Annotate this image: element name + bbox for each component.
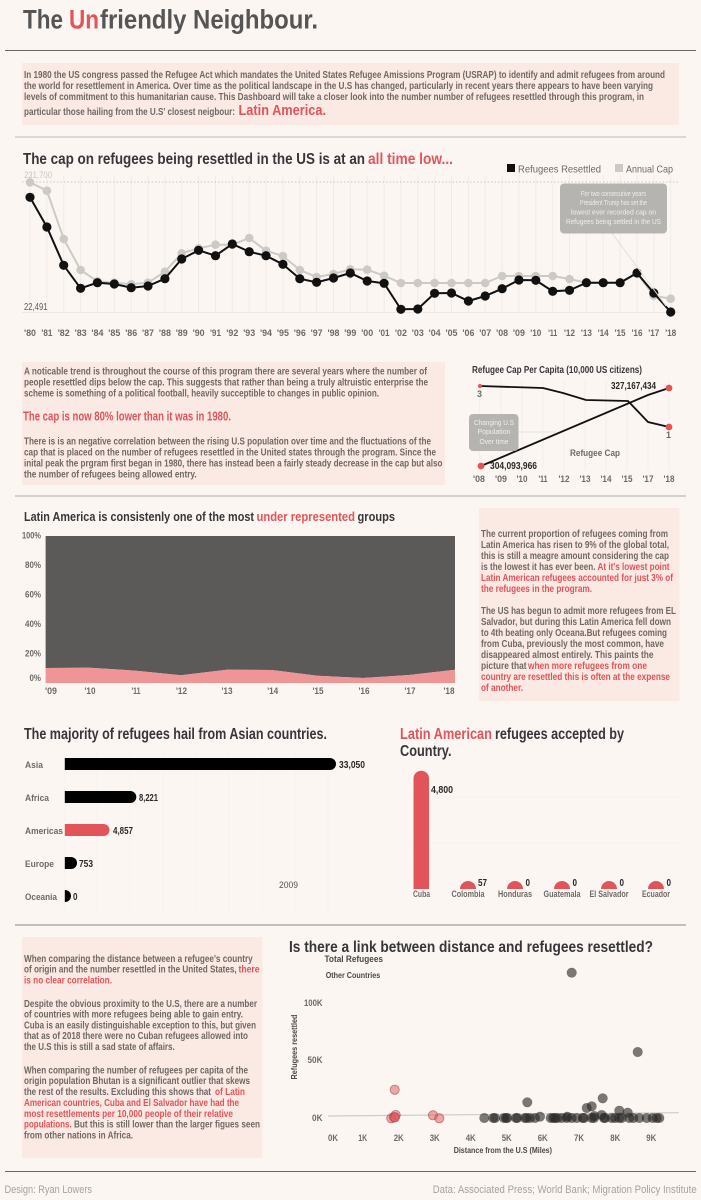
panel: distance text: Despite the obvious proximity to the U.S, there are a number: [24, 999, 257, 1010]
x axis: 1K: [358, 1133, 367, 1144]
bar: Cuba: [413, 771, 453, 900]
title: The: [23, 4, 63, 34]
heading: all time low: The cap on refugees being resettled in the US is at an: [23, 151, 365, 168]
bar: Oceania: [25, 890, 78, 903]
year axis: '17: [642, 474, 654, 485]
legend: Annual Cap: [626, 164, 673, 176]
year axis: '08: [473, 474, 485, 485]
points: Latin America: [387, 1085, 444, 1123]
year axis: '10: [84, 686, 96, 697]
year axis: [45, 686, 454, 697]
percent axis: 100%: [22, 530, 41, 542]
heading: all time low: all time low...: [368, 151, 453, 168]
callout: Trump cap: lowest ever recorded cap on: [571, 208, 656, 216]
bar: Europe: [25, 857, 93, 870]
chart heading: Country.: [400, 743, 452, 760]
panel: distance text: When comparing the distance between a refugee's country: [24, 954, 253, 965]
panel: latin america proportion text: [479, 508, 680, 701]
year axis: '92: [226, 328, 238, 339]
value labels: 327,167,434: [611, 381, 656, 392]
year axis: '99: [344, 328, 356, 339]
year axis: '88: [159, 328, 171, 339]
line: refugee cap: [480, 386, 669, 427]
year axis: '18: [665, 328, 676, 339]
panel: refugees by region bar chart: [24, 726, 365, 912]
panel: distance text: there: [238, 964, 260, 976]
value labels: [477, 381, 672, 472]
year axis: '03: [412, 328, 424, 339]
year axis: '11: [548, 328, 558, 339]
callout: Trump cap: Refugees being settled in the US: [566, 217, 661, 226]
area: Latin America: [46, 668, 455, 683]
x axis: 4K: [466, 1133, 476, 1144]
year axis: '12: [558, 474, 570, 485]
footer: design credit: Design: Ryan Lowers: [4, 1184, 92, 1196]
chart heading: refugees accepted by: [495, 726, 624, 743]
year axis: '97: [311, 328, 323, 339]
panel: distance text: But this is still lower than the larger figues seen: [74, 1120, 260, 1130]
value label: peak: 231,700: [24, 170, 52, 181]
x axis: 2K: [394, 1133, 404, 1144]
value labels: 1: [666, 430, 672, 441]
bar: Colombia: 57: [478, 878, 487, 889]
percent axis: 0%: [30, 673, 41, 684]
panel: latin america proportion text: the refugees in the program.: [481, 584, 592, 595]
bar: Africa: [25, 791, 158, 804]
panel: latin america proportion text: is the lowest it has ever been.: [481, 562, 596, 573]
callout: Trump cap: For two consecutive years: [581, 189, 646, 198]
points: other countries: [480, 968, 664, 1123]
year axis: '09: [513, 328, 525, 339]
bar: Colombia: [452, 878, 487, 900]
year axis: '09: [495, 474, 507, 485]
year axis: '15: [622, 474, 633, 485]
year axis: '18: [444, 686, 454, 697]
annual cap series: [30, 182, 671, 299]
bar: Cuba: 4,800: [431, 785, 453, 796]
year axis: '10: [516, 474, 528, 485]
panel: latin america proportion text: picture that: [481, 661, 527, 672]
y axis: 0K: [312, 1113, 323, 1124]
year axis: '96: [294, 328, 306, 339]
year axis: '15: [615, 328, 626, 339]
callout: changing population: Changing U.S: [474, 418, 514, 427]
panel: distance text: most resettlements per 10,000 people of their relative: [24, 1109, 233, 1120]
chart heading: Latin American: [400, 726, 492, 743]
panel: distance scatter plot: [289, 939, 679, 1155]
x axis: 8K: [610, 1133, 620, 1144]
panel: noticable trend text: scheme is something of a political football, heavily succeptible to changes in public opinion.: [24, 388, 379, 400]
panel: noticable trend text: There is is an negative correlation between the rising U.S population over time and the fluctuations of the: [24, 436, 431, 448]
callout: Trump cap: President Trump has set the: [580, 198, 647, 207]
panel: latin america proportion text: At it's lowest point: [598, 562, 670, 573]
panel: noticable trend text: the number of refugees being allowed entry.: [24, 470, 197, 480]
legend: colour key: [324, 954, 383, 980]
bar: Africa: Africa: [25, 793, 50, 804]
panel: introduction: Latin America.: [238, 103, 326, 119]
year axis: '13: [580, 474, 590, 485]
year axis: '91: [210, 328, 222, 339]
legend: colour key: Other Countries: [326, 970, 380, 980]
year axis: '82: [58, 328, 70, 339]
year axis: '06: [462, 328, 474, 339]
year axis: '84: [91, 328, 104, 339]
panel: refugee cap per capita slope chart: [469, 364, 674, 485]
bar: El Salvador: [590, 878, 629, 900]
year axis: '16: [358, 686, 370, 697]
panel: distance text: that as of 2018 there were no Cuban refugees allowed into: [24, 1031, 248, 1042]
bar: Ecuador: [642, 878, 671, 900]
panel: distance text: of Latin: [215, 1087, 245, 1098]
panel: distance text: the U.S this is still a sad state of affairs.: [24, 1042, 175, 1053]
panel: distance text: [22, 937, 262, 1158]
year axis: '80: [24, 328, 36, 339]
percent axis: 80%: [25, 560, 41, 571]
year axis: '14: [600, 474, 612, 485]
bar: Americas: [25, 824, 133, 837]
year axis: '17: [404, 686, 416, 697]
chart heading: Refugee Cap Per Capita (10,000 US citizens): [472, 364, 642, 376]
panel: latin america proportion text: disappeared almost entirely. This paints the: [481, 650, 654, 661]
panel: distance text: of origin and the number resettled in the United States,: [24, 964, 237, 976]
bar: Americas: 4,857: [113, 826, 133, 837]
year axis: '85: [108, 328, 121, 339]
legend: [507, 164, 673, 176]
panel: latin america proportion text: of another.: [481, 683, 523, 694]
bar: Asia: 33,050: [339, 760, 365, 771]
bar: Honduras: 0: [526, 878, 530, 889]
panel: noticable trend text: people resettled dips below the cap. This suggests that rather than being a truly altruistic enterprise the: [24, 378, 428, 388]
chart heading: [400, 726, 624, 760]
callout: changing population: Population: [478, 427, 510, 436]
year axis: '87: [142, 328, 154, 339]
title: Un: [69, 4, 99, 34]
bar: Honduras: Honduras: [498, 889, 532, 900]
year axis: '17: [648, 328, 659, 339]
bar: El Salvador: El Salvador: [590, 889, 629, 900]
panel: distance text: When comparing the number of refugees per capita of the: [24, 1066, 248, 1076]
panel: noticable trend text: The cap is now 80% lower than it was in 1980.: [23, 410, 231, 424]
panel: under represented area chart: [22, 509, 455, 697]
year axis: '08: [496, 328, 508, 339]
year axis: '12: [176, 686, 187, 697]
x axis: 9K: [646, 1133, 656, 1144]
y axis: 50K: [308, 1055, 323, 1066]
value label: low: 22,491: [24, 302, 48, 313]
bar: Asia: [25, 758, 365, 771]
year axis: '05: [446, 328, 458, 339]
year axis: '02: [395, 328, 407, 339]
title: friendly Neighbour.: [100, 4, 318, 34]
panel: distance text: is no clear correlation.: [24, 976, 112, 986]
year axis: '13: [581, 328, 592, 339]
percent axis: 60%: [25, 590, 41, 600]
year axis: '04: [429, 328, 441, 339]
x axis: 0K: [328, 1133, 338, 1144]
callout: changing population: [469, 414, 556, 451]
panel: refugee cap line chart: [22, 151, 679, 339]
panel: noticable trend text: inital peak the prgram first began in 1980, there has instead been a fairly steady decrease in the cap but also: [24, 458, 442, 470]
y axis: [289, 998, 323, 1124]
percent axis: [22, 530, 41, 684]
bar: Ecuador: Ecuador: [642, 889, 670, 900]
panel: distance text: from other nations in Africa.: [24, 1130, 133, 1142]
bar: El Salvador: 0: [620, 878, 624, 889]
year axis: '86: [125, 328, 137, 339]
year axis: '14: [267, 686, 279, 697]
callout: changing population: Over time: [480, 437, 508, 446]
x axis: 6K: [538, 1133, 548, 1144]
bar: Americas: Americas: [25, 826, 63, 837]
year axis: '10: [530, 328, 541, 339]
panel: distance text: American countries, Cuba and El Salvador have had the: [24, 1098, 239, 1109]
panel: distance text: origin population Bhutan is a significant outlier that skews: [24, 1076, 250, 1087]
bar: Honduras: [498, 878, 532, 900]
year axis: '15: [312, 686, 324, 697]
bar: Guatemala: [544, 878, 581, 900]
legend: colour key: Total Refugees: [324, 954, 383, 964]
x axis: Distance from the U.S (Miles): [454, 1145, 552, 1155]
year axis: '90: [193, 328, 205, 339]
bar: Africa: 8,221: [139, 793, 158, 804]
percent axis: 20%: [25, 648, 41, 660]
chart heading: Is there a link between distance and refugees resettled?: [289, 939, 653, 956]
year axis: '11: [538, 474, 548, 485]
x axis: 3K: [430, 1133, 440, 1144]
chart heading: Latin America is consistenly one of the most: [24, 509, 255, 524]
bar: Cuba: Cuba: [413, 889, 431, 900]
panel: noticable trend text: A noticable trend is throughout the course of this program there are several years where the number of: [24, 366, 427, 378]
bar: Oceania: 0: [73, 892, 78, 903]
panel: distance text: of countries with more refugees being able to gain entry.: [24, 1010, 243, 1020]
panel: introduction: particular those hailing from the U.S' closest neigbour:: [24, 107, 235, 118]
value labels: Refugee Cap: [570, 448, 620, 459]
bar: Ecuador: 0: [666, 878, 671, 889]
panel: latin american refugees by country: [400, 726, 680, 900]
bar: Europe: 753: [79, 859, 93, 870]
panel: noticable trend text: [22, 362, 445, 485]
year axis: '01: [379, 328, 390, 339]
year axis: '18: [664, 474, 674, 485]
year axis: '14: [598, 328, 609, 339]
year axis: '16: [632, 328, 642, 339]
year axis: '89: [176, 328, 188, 339]
bar: Guatemala: Guatemala: [544, 889, 581, 900]
year axis: '93: [243, 328, 255, 339]
x axis: 7K: [574, 1133, 584, 1144]
year axis: '00: [361, 328, 373, 339]
chart heading: The majority of refugees hail from Asian countries.: [24, 726, 327, 743]
year axis: '11: [132, 686, 141, 697]
bar: Oceania: Oceania: [25, 892, 58, 903]
chart heading: under represented: [256, 509, 355, 524]
bar: Colombia: Colombia: [452, 889, 485, 900]
year axis: '98: [328, 328, 340, 339]
year axis: '81: [41, 328, 53, 339]
refugees resettled series: [30, 197, 671, 312]
bar: Guatemala: 0: [572, 878, 577, 889]
x axis: [328, 1133, 656, 1155]
year axis: '95: [277, 328, 290, 339]
year axis: '94: [260, 328, 273, 339]
year axis: [24, 328, 676, 339]
x axis: 5K: [502, 1133, 512, 1144]
bar: Asia: Asia: [25, 760, 44, 771]
value labels: 304,093,966: [490, 461, 537, 472]
panel: distance text: populations.: [24, 1120, 72, 1130]
year label: 2009: [279, 880, 298, 891]
legend: Refugees Resettled: [518, 164, 601, 176]
year axis: '13: [222, 686, 232, 697]
end points: [478, 384, 672, 469]
year axis: [473, 474, 674, 485]
year axis: '07: [479, 328, 491, 339]
panel: noticable trend text: cap that is placed on the number of refugees resettled in the United states through the program. Since the: [24, 448, 436, 458]
bar: Europe: Europe: [25, 859, 54, 870]
year axis: '83: [75, 328, 87, 339]
year axis: '12: [564, 328, 575, 339]
year axis: '09: [45, 686, 57, 697]
callout: Trump cap: [560, 184, 667, 306]
panel: introduction: [22, 63, 679, 125]
percent axis: 40%: [25, 619, 41, 630]
line: US population: [481, 388, 669, 466]
value labels: 3: [477, 389, 482, 400]
title: [23, 4, 318, 34]
panel: distance text: Cuba is an easily distinguishable exception to this, but given: [24, 1020, 256, 1032]
y axis: 100K: [304, 998, 323, 1009]
chart heading: groups: [358, 509, 395, 524]
panel: latin america proportion text: when more refugees from one: [527, 661, 647, 672]
panel: distance text: the rest of the results. Excluding this shows that: [24, 1087, 211, 1098]
area: other regions: [46, 536, 455, 678]
y axis: Refugees resettled: [289, 1014, 299, 1080]
